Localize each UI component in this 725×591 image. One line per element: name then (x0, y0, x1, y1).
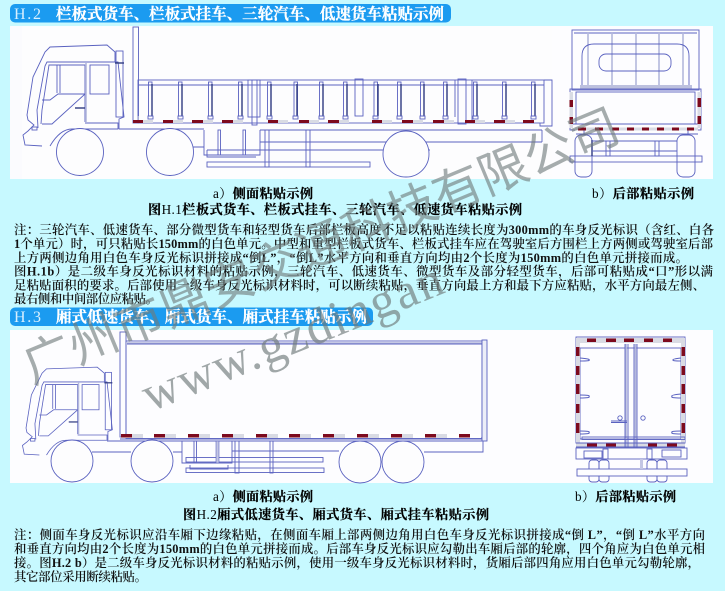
watermark: company name: 广州市鼎安交通科技有限公司 (11, 87, 629, 398)
side reflective strip (121, 434, 481, 438)
panel: H.1 truck drawings (10, 26, 713, 179)
side view: stake truck (23, 27, 552, 177)
note: H.2: 注：侧面车身反光标识应沿车厢下边缘粘贴，在侧面车厢上部两侧边角用白色车身反光标识拼接成“倒 L”，“倒 L”水平方向 (14, 527, 705, 542)
rear view: stake truck (570, 30, 702, 177)
note: H.2 (14, 527, 705, 584)
heading: H.3: H.3 (14, 309, 41, 326)
note: H.2: 其它部位采用断续粘贴。 (14, 569, 147, 584)
stakes (148, 82, 536, 119)
heading: H.3: 厢式低速货车、厢式货车、厢式挂车粘贴示例 (56, 307, 367, 326)
panel: H.2 truck drawings (10, 330, 713, 483)
caption: H.1 b: b）后部粘贴示例 (592, 185, 694, 201)
figure title: H.2: 图H.2厢式低速货车、厢式货车、厢式挂车粘贴示例 (183, 506, 489, 522)
cargo body (133, 27, 552, 126)
heading: H.2: 栏板式货车、栏板式挂车、三轮汽车、低速货车粘贴示例 (56, 4, 444, 23)
watermark: website: www.gzdingan (133, 250, 451, 422)
caption: H.2 a: a）侧面粘贴示例 (213, 488, 313, 504)
note: H.1: 上方两侧边角用白色车身反光标识拼接成“倒L”，“倒L”水平方向和垂直方向均由2个长度为150mm的白色单元拼接而成。 (14, 250, 688, 265)
side reflective marks (133, 120, 534, 123)
note: H.1 (14, 222, 715, 306)
note: H.1: 足粘贴面积的要求。后部使用一级车身反光标识材料时，可以断续粘贴，垂直方向最上方和最下方应粘贴，水平方向最左侧、 (14, 278, 705, 292)
chassis (92, 441, 339, 473)
wheels (56, 128, 429, 177)
rear view: box truck (576, 337, 687, 482)
heading: H.2: H.2 (14, 6, 41, 23)
note: H.2: 和垂直方向均由2个长度为150mm的白色单元拼接而成。后部车身反光标识应勾勒出车厢后部的轮廓，四个角应为白色单元相 (14, 541, 705, 556)
box body (120, 332, 487, 452)
note: H.1: 最右侧和中间部位应粘贴。 (14, 291, 158, 306)
side view: box truck (22, 332, 487, 483)
note: H.1: 图H.1b）是二级车身反光标识材料的粘贴示例，三轮汽车、低速货车、微型货车及部分轻型货车，后部可粘贴成“口”形以满 (14, 264, 714, 278)
figure title: H.1: 图H.1栏板式货车、栏板式挂车、三轮汽车、低速货车粘贴示例 (148, 201, 522, 217)
chassis (119, 129, 542, 167)
wheels (51, 440, 424, 483)
note: H.2: 接。图H.2 b）是二级车身反光标识材料的粘贴示例，使用一级车身反光标识材料时，货厢后部四角应用白色单元勾勒轮廓， (14, 555, 700, 570)
note: H.1: 1个单元）时，可只粘贴长150mm的白色单元。中型和重型栏板式货车、栏板式挂车应在驾驶室后方围栏上方两侧或驾驶室后部 (14, 236, 714, 251)
caption: H.1 a: a）侧面粘贴示例 (213, 185, 313, 201)
note: H.1: 注：三轮汽车、低速货车、部分微型货车和轻型货车后部栏板高度不足以粘贴连续长度为300mm的车身反光标识（含红、白各 (14, 222, 715, 237)
caption: H.2 b: b）后部粘贴示例 (575, 488, 676, 504)
